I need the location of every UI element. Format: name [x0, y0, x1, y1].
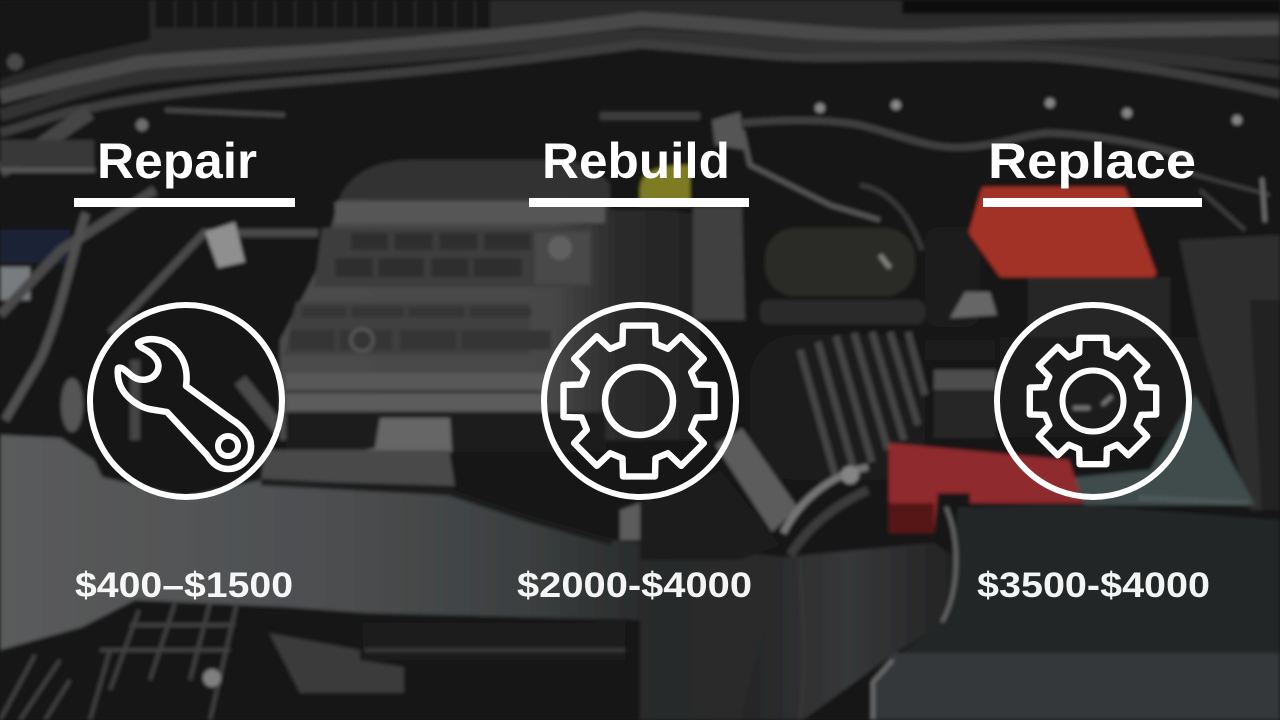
right lower housing: [873, 505, 1280, 720]
right of cover: [610, 150, 700, 210]
price: Repair: $400–$1500: [75, 566, 293, 605]
air tube and clamp: [640, 470, 780, 560]
heading: Replace: Replace: [988, 133, 1196, 189]
engine cover: [339, 160, 640, 240]
underline: Rebuild: [529, 198, 749, 207]
column: Replace: [977, 133, 1210, 605]
right box: [1179, 235, 1280, 510]
lower red battery clamp: [889, 443, 1083, 533]
column: Rebuild: [517, 133, 752, 605]
icon: small gear in circle: [997, 305, 1189, 497]
column: Repair: [74, 133, 295, 605]
underline: Replace: [983, 198, 1202, 207]
price: Rebuild: $2000-$4000: [517, 566, 752, 605]
icon: large gear in circle: [544, 305, 736, 497]
heading: Rebuild: Rebuild: [542, 133, 730, 189]
price: Replace: $3500-$4000: [977, 566, 1210, 605]
corrugated hose: [750, 335, 925, 480]
large intake: [0, 435, 958, 720]
teal panel: [1068, 395, 1255, 505]
dark block below red: [1028, 277, 1170, 337]
gear hub specks: [1073, 396, 1112, 408]
icon: wrench in circle: [90, 305, 282, 497]
left clutter: [0, 140, 94, 167]
heading: Repair: Repair: [97, 133, 257, 189]
top area: [0, 0, 1280, 100]
bottom dark grid: [0, 603, 237, 720]
hood seal bands: [0, 19, 1280, 97]
underline: Repair: [74, 198, 295, 207]
red battery cover: [973, 191, 1152, 273]
